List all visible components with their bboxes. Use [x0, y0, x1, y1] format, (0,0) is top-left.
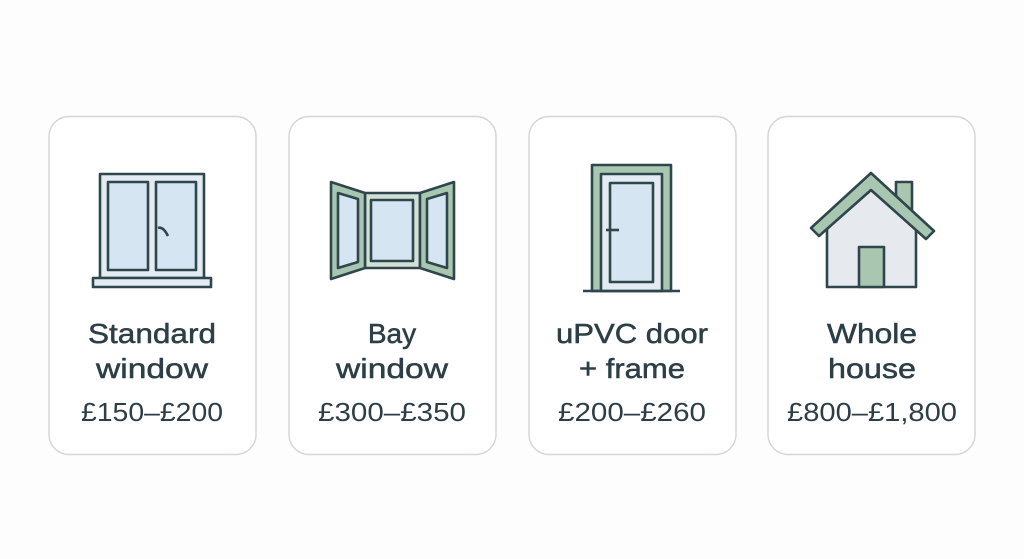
label: bay window: Bay	[368, 318, 416, 349]
panel: whole house	[768, 116, 975, 454]
label: upvc door: + frame	[579, 353, 685, 384]
label: standard window: window	[95, 353, 209, 384]
label: upvc door: uPVC door	[556, 318, 708, 349]
price: bay window: £300–£350	[318, 397, 466, 427]
icon: house	[811, 173, 934, 287]
price: standard window: £150–£200	[81, 397, 223, 427]
panel: standard window	[49, 116, 256, 454]
icon: door	[583, 165, 680, 291]
label: whole house: Whole	[827, 318, 917, 349]
label: whole house	[827, 318, 917, 384]
icon: bay window	[331, 182, 454, 279]
label: upvc door	[556, 318, 708, 384]
panel: bay window	[289, 116, 496, 454]
panel: upvc door	[529, 116, 736, 454]
icon: standard window	[93, 174, 211, 287]
price: upvc door: £200–£260	[558, 397, 706, 427]
label: standard window	[88, 318, 216, 384]
label: whole house: house	[828, 353, 916, 384]
label: bay window: window	[335, 353, 449, 384]
label: standard window: Standard	[88, 318, 216, 349]
label: bay window	[335, 318, 449, 384]
price: whole house: £800–£1,800	[787, 397, 957, 427]
